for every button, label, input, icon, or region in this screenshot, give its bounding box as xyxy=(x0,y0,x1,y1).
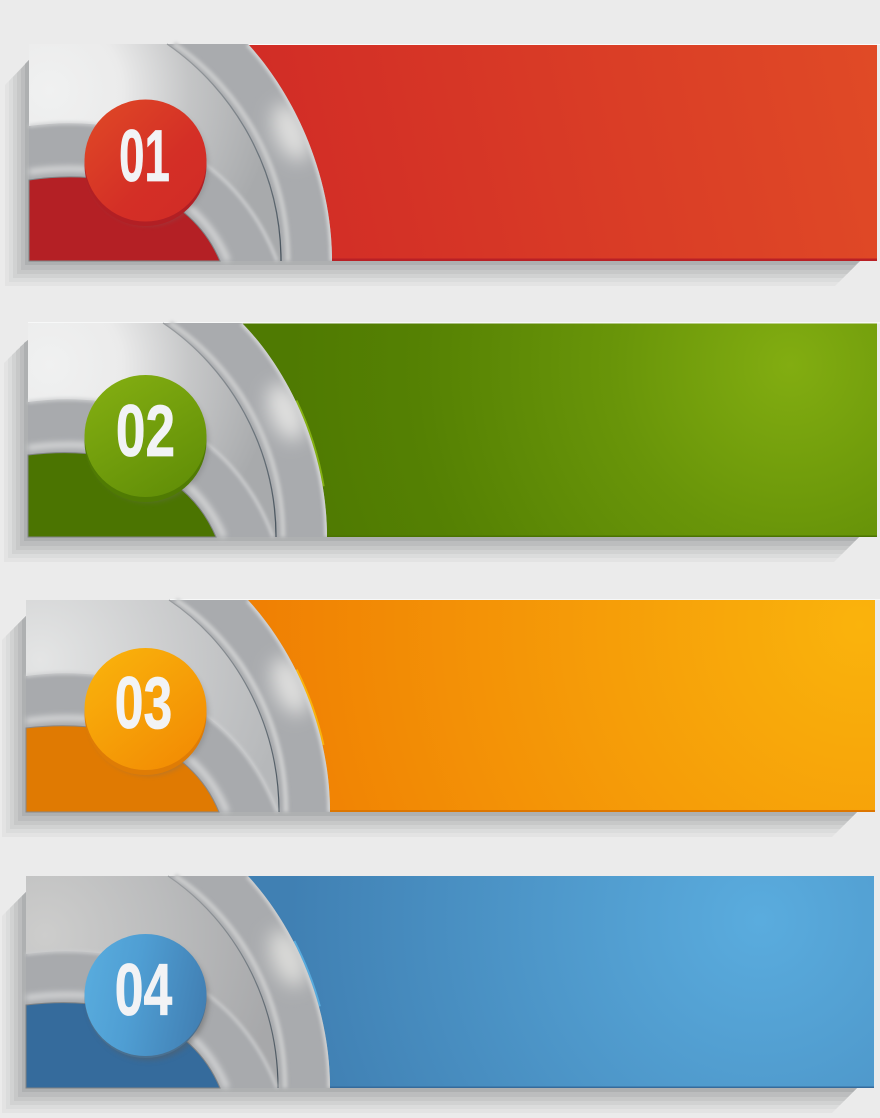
metal arcs 01 xyxy=(29,44,332,261)
number disc 03 xyxy=(84,648,208,775)
banner body 01 xyxy=(29,45,877,261)
inner dark shape 03 xyxy=(26,726,219,812)
stepped shadow 04 xyxy=(2,892,857,1113)
number 02: 02 xyxy=(116,389,175,472)
number disc 01 xyxy=(84,100,208,226)
banner body 02 xyxy=(28,323,877,537)
number 01: 01 xyxy=(119,115,170,197)
number 03: 03 xyxy=(115,662,172,744)
stepped shadow 02 xyxy=(4,340,859,562)
panel: banner 04 (blue) xyxy=(2,876,874,1113)
number disc 04 xyxy=(84,934,208,1060)
banner body 04 xyxy=(26,876,874,1088)
stepped shadow 01 xyxy=(5,60,860,286)
metal arcs 02 xyxy=(28,323,327,537)
inner dark shape 04 xyxy=(26,1003,220,1088)
panel: banner 02 (green) xyxy=(4,322,880,562)
metal arcs 03 xyxy=(26,600,330,812)
panel: banner 01 (red) xyxy=(5,44,880,286)
banner body 03 xyxy=(26,600,875,812)
number disc 02 xyxy=(84,375,208,502)
inner dark shape 02 xyxy=(28,453,216,537)
metal arcs 04 xyxy=(26,876,330,1088)
number 04: 04 xyxy=(115,949,173,1031)
stepped shadow 03 xyxy=(2,616,857,837)
inner dark shape 01 xyxy=(29,177,220,261)
panel: banner 03 (orange) xyxy=(2,599,880,837)
